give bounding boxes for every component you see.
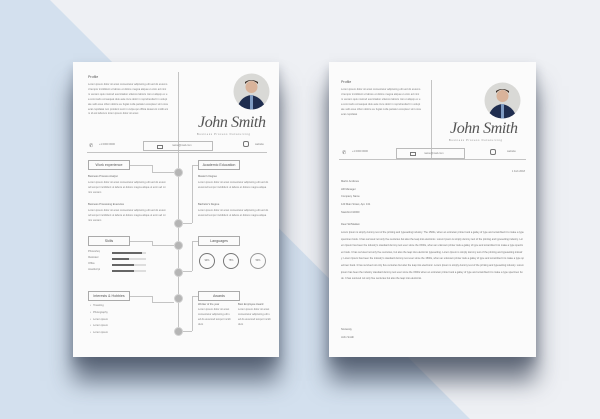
- address block: Company Name: [341, 195, 360, 198]
- skill bars: [88, 250, 146, 272]
- language rings: 50%: [256, 259, 260, 262]
- text block: education: Lorem ipsum dolor sit amet consectetur adipiscing elit sed do eiusmod tempor incididunt ut labore et dolore magna aliqua: [198, 181, 268, 189]
- heading: awards: Awards: [213, 294, 225, 298]
- contact row: +1 0000 0000: [99, 143, 115, 146]
- contact row: [89, 141, 264, 151]
- subtitle: Business Process Outsourcing: [197, 133, 251, 136]
- email box: [396, 148, 465, 159]
- language rings: [199, 253, 266, 269]
- panel: resume page: [73, 62, 279, 357]
- date: 1 Feb 2018: [512, 170, 525, 173]
- heading: work experience: Work experience: [96, 163, 122, 167]
- text block: work: [88, 175, 166, 222]
- skill bars: JavaScript: [88, 268, 100, 271]
- contact row: website: [507, 150, 516, 153]
- skill bars: Office: [88, 262, 95, 265]
- closing: [341, 328, 354, 339]
- heading: academic education: [198, 160, 240, 170]
- heading: languages: Languages: [210, 239, 228, 243]
- list: hobbies: • Photography: [90, 311, 108, 314]
- language rings: 75%: [229, 259, 233, 262]
- address block: Martin Andrews: [341, 180, 359, 183]
- list: hobbies: • Lorem ipsum: [90, 318, 108, 321]
- address block: [341, 180, 370, 214]
- text block: awards: Worker of the year: [198, 303, 219, 306]
- heading: skills: [88, 236, 130, 246]
- text block: education: Lorem ipsum dolor sit amet consectetur adipiscing elit sed do eiusmod tempor incididunt ut labore et dolore magna aliqua: [198, 209, 268, 217]
- photo: [234, 74, 270, 110]
- address block: Stamford 10000: [341, 211, 359, 214]
- text block: education: Bachelor's Degree: [198, 203, 219, 206]
- text block: awards: Lorem ipsum dolor sit amet consectetur adipiscing elit sed do eiusmod tempor incididunt: [198, 308, 230, 326]
- list: hobbies: • Lorem ipsum: [90, 324, 108, 327]
- text block: work: Business Process Analyst: [88, 175, 118, 178]
- icon: timeline dot: [174, 168, 183, 177]
- heading: work experience: [88, 160, 130, 170]
- icon: phone: ✆: [342, 150, 346, 156]
- icon: phone: ✆: [89, 143, 93, 149]
- text block: education: [198, 175, 268, 217]
- contact row: +1 0000 0000: [352, 150, 368, 153]
- heading: profile: Profile: [88, 75, 98, 79]
- timeline: [177, 154, 180, 332]
- list: hobbies: • Lorem ipsum: [90, 331, 108, 334]
- skill bars: Photoshop: [88, 250, 100, 253]
- text block: awards: Best Employee Award: [238, 303, 263, 306]
- address block: HR Manager: [341, 188, 356, 191]
- text block: work: Lorem ipsum dolor sit amet consectetur adipiscing elit sed do eiusmod tempor incididunt ut labore et dolore magna aliqua ut enim ad minim veniam: [88, 209, 166, 222]
- text block: work: Business Processing Executive: [88, 203, 124, 206]
- icon: web: [490, 149, 496, 155]
- text block: education: Master's Degree: [198, 175, 217, 178]
- text block: profile: Lorem ipsum dolor sit amet consectetur adipiscing elit sed do eiusmod tempor incididunt ut labore et dolore magna aliqua ut enim ad minim veniam quis nostrud exercitation ullamco laboris nisi ut aliquip ex ea commodo consequat duis aute irure dolor in reprehenderit in voluptate velit esse cillum dolore eu fugiat nulla pariatur excepteur sint occaecat cupidatat: [341, 88, 421, 116]
- letter body: Lorem Ipsum is simply dummy text of the printing and typesetting industry. The 1500s, when an unknown printer took a galley of type and scrambled it to make a type specimen book. It has survived not only five centuries but also the leap into electronic. Lorem Ipsum is simply dummy text of the printing and typesetting industry. Lorem Ipsum has been the industry's standard dummy text ever since the 1500s, when an unknown printer took a galley of type and scrambled it to make a type specimen book. It has survived not only five centuries, but also the leap into electronic typesetting. Lorem Ipsum is simply dummy text of the printing and typesetting industry. Lorem Ipsum has been the industry's standard dummy text ever since the 1500s, when an unknown printer took a galley of type and scrambled it to make a type specimen book. It has survived not only five centuries but also the leap into electronic. Lorem Ipsum is simply dummy text of the printing and typesetting industry. Lorem ipsum has been the industry standard dummy text ever since the 1500s when an unknown printer took a galley of type and scrambled it to make a type specimen book. It has survived not only five centuries but also the leap into electronic.: [341, 231, 524, 280]
- contact row: [342, 148, 516, 159]
- closing: Sincerely,: [341, 328, 352, 331]
- heading: skills: Skills: [105, 239, 113, 243]
- list: hobbies: [90, 304, 108, 334]
- heading: awards: [198, 291, 240, 301]
- text block: awards: Lorem ipsum dolor sit amet consectetur adipiscing elit sed do eiusmod tempor incididunt: [238, 308, 270, 326]
- heading: interests: Interests & Hobbies: [93, 294, 125, 298]
- icon: web: [243, 141, 249, 147]
- name title: John Smith: [198, 114, 266, 131]
- heading: languages: [198, 236, 240, 246]
- heading: academic education: Academic Education: [203, 163, 235, 167]
- text block: work: Lorem ipsum dolor sit amet consectetur adipiscing elit sed do eiusmod tempor incididunt ut labore et dolore magna aliqua ut enim ad minim veniam: [88, 181, 166, 194]
- list: hobbies: • Traveling: [90, 304, 104, 307]
- text block: awards: [198, 303, 270, 326]
- name title: John Smith: [450, 120, 518, 137]
- email box: name@mail.com: [424, 152, 444, 154]
- heading: interests: [88, 291, 130, 301]
- photo: [484, 82, 520, 118]
- closing: John Smith: [341, 336, 354, 339]
- text block: profile: Lorem ipsum dolor sit amet consectetur adipiscing elit sed do eiusmod tempor incididunt ut labore et dolore magna aliqua ut enim ad minim veniam quis nostrud exercitation ullamco laboris nisi ut aliquip ex ea commodo consequat duis aute irure dolor in reprehenderit in voluptate velit esse cillum dolore eu fugiat nulla pariatur excepteur sint occaecat cupidatat non proident sunt in culpa qui officia deserunt mollit anim id est laborum lorem ipsum dolor sit amet: [88, 83, 168, 115]
- heading: profile: Profile: [341, 80, 351, 84]
- panel: cover letter page: [329, 62, 536, 357]
- salutation: Dear Sir/Madam: [341, 223, 360, 226]
- email box: name@mail.com: [172, 144, 192, 147]
- skill bars: Illustrator: [88, 256, 99, 259]
- language rings: 90%: [205, 259, 209, 262]
- address block: 123 Main Street, Apt. 131: [341, 203, 370, 206]
- subtitle: Business Process Outsourcing: [449, 139, 503, 142]
- email box: [143, 141, 213, 151]
- contact row: website: [255, 143, 264, 146]
